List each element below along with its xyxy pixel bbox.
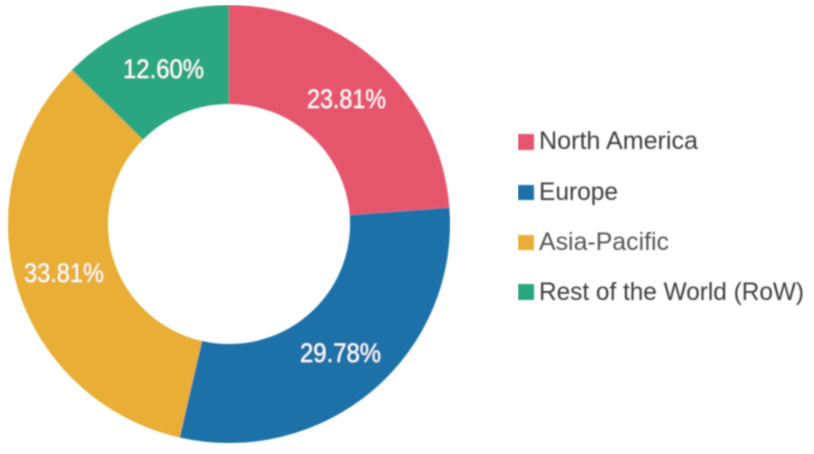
legend (518, 127, 804, 306)
segment: Asia-Pacific 33.81% (8, 70, 202, 437)
segment: Rest of the World 12.60% (72, 5, 229, 140)
label: 29.78%: 29.78% (300, 338, 381, 368)
segment: North America 23.81% (229, 5, 449, 215)
legend item: Europe: Europe (539, 178, 618, 206)
donut chart (8, 5, 450, 443)
legend item: North America: North America (539, 127, 698, 155)
legend item: Asia-Pacific: Asia-Pacific (539, 228, 669, 256)
label: 23.81%: 23.81% (307, 84, 386, 114)
label: 12.60%: 12.60% (123, 54, 204, 84)
segment: Europe 29.78% (180, 208, 450, 443)
legend item: Rest of the World (RoW): Rest of the World (RoW) (539, 278, 804, 306)
label: 33.81%: 33.81% (24, 258, 104, 288)
